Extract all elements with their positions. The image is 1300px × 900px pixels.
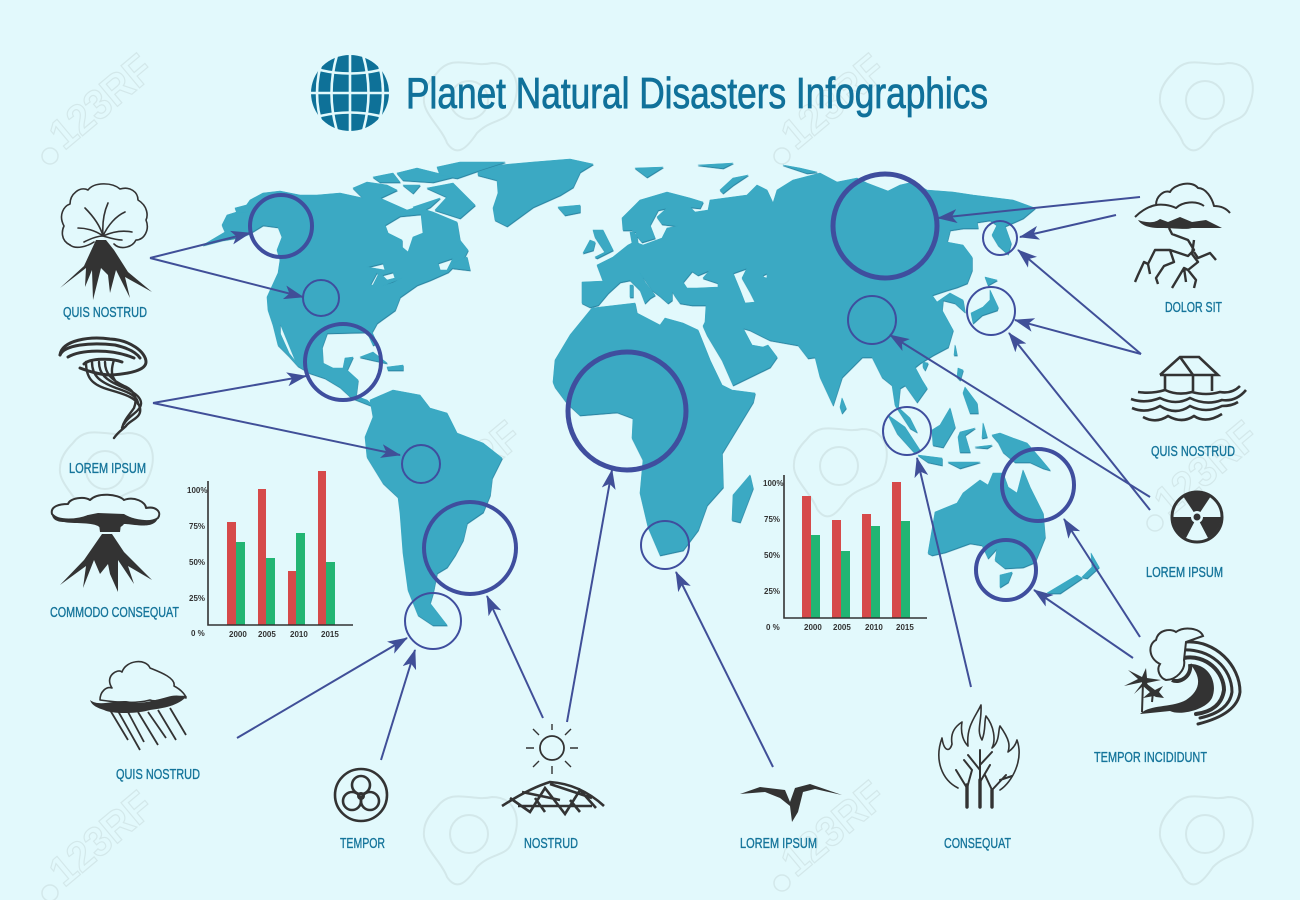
bar chart: left: 2005 [258,630,276,639]
bar chart: left: 25% [189,594,205,603]
icon: radiation [1172,491,1222,542]
icon: rain cloud [90,662,187,750]
highlight circles [250,174,1074,649]
bar chart: right [763,475,927,632]
icon: volcano [60,184,152,300]
labels: COMMODO CONSEQUAT [50,604,179,621]
labels: QUIS NOSTRUD [116,766,200,783]
Arctic islands [353,182,397,198]
Japan and East Asian islands [971,290,998,323]
bar chart: right: 2005 [833,623,851,632]
labels: CONSEQUAT [944,835,1011,852]
Caribbean [360,352,387,363]
bar chart: left: 50% [189,558,205,567]
icon: burning trees [939,705,1019,807]
bar chart: left: 75% [189,522,205,531]
bar chart: left: 2015 [321,630,339,639]
icon: eruption cloud [52,495,159,592]
icon: sun and cracked earth [502,724,604,814]
New Zealand [1047,575,1082,593]
Greenland and Iceland [478,159,593,226]
labels: LOREM IPSUM [740,835,817,852]
labels: QUIS NOSTRUD [1151,443,1235,460]
bar chart: right: 25% [764,587,780,596]
bar chart: right: 75% [764,515,780,524]
title: Planet Natural Disasters Infographics [406,69,988,118]
bar chart: left [187,471,353,639]
labels: TEMPOR [340,835,385,852]
bar chart: left: 2000 [229,630,247,639]
labels: QUIS NOSTRUD [63,304,147,321]
bar chart: right: 50% [764,551,780,560]
labels: TEMPOR INCIDIDUNT [1094,749,1207,766]
icon: flooded house [1131,357,1246,420]
labels [50,299,1235,852]
South America [365,390,502,625]
Eurasia [582,173,1035,432]
icon: earthquake [740,784,842,822]
labels: NOSTRUD [524,835,578,852]
bar chart: left: 2010 [290,630,308,639]
icon: globe [311,55,389,131]
Africa [553,303,755,555]
world map [203,159,1099,625]
bar chart: right: 0 % [766,623,780,632]
icon: tsunami wave [1124,629,1240,724]
European islands [593,230,613,258]
labels: LOREM IPSUM [69,460,146,477]
bar chart: right: 2015 [896,623,914,632]
icon: thunderstorm [1135,184,1230,288]
bar chart: left: 100% [187,486,207,495]
labels: DOLOR SIT [1165,299,1222,316]
bar chart: right: 2000 [804,623,822,632]
icon: tornado [60,338,146,438]
Southeast Asia islands [957,368,963,380]
North America [203,191,468,407]
icon: biohazard [335,769,387,821]
arrows [150,197,1150,767]
labels: LOREM IPSUM [1146,564,1223,581]
bar chart: right: 100% [763,479,783,488]
bar chart: left: 0 % [191,629,205,638]
Madagascar [732,475,753,522]
Australia [928,470,1045,568]
bar chart: right: 2010 [865,623,883,632]
